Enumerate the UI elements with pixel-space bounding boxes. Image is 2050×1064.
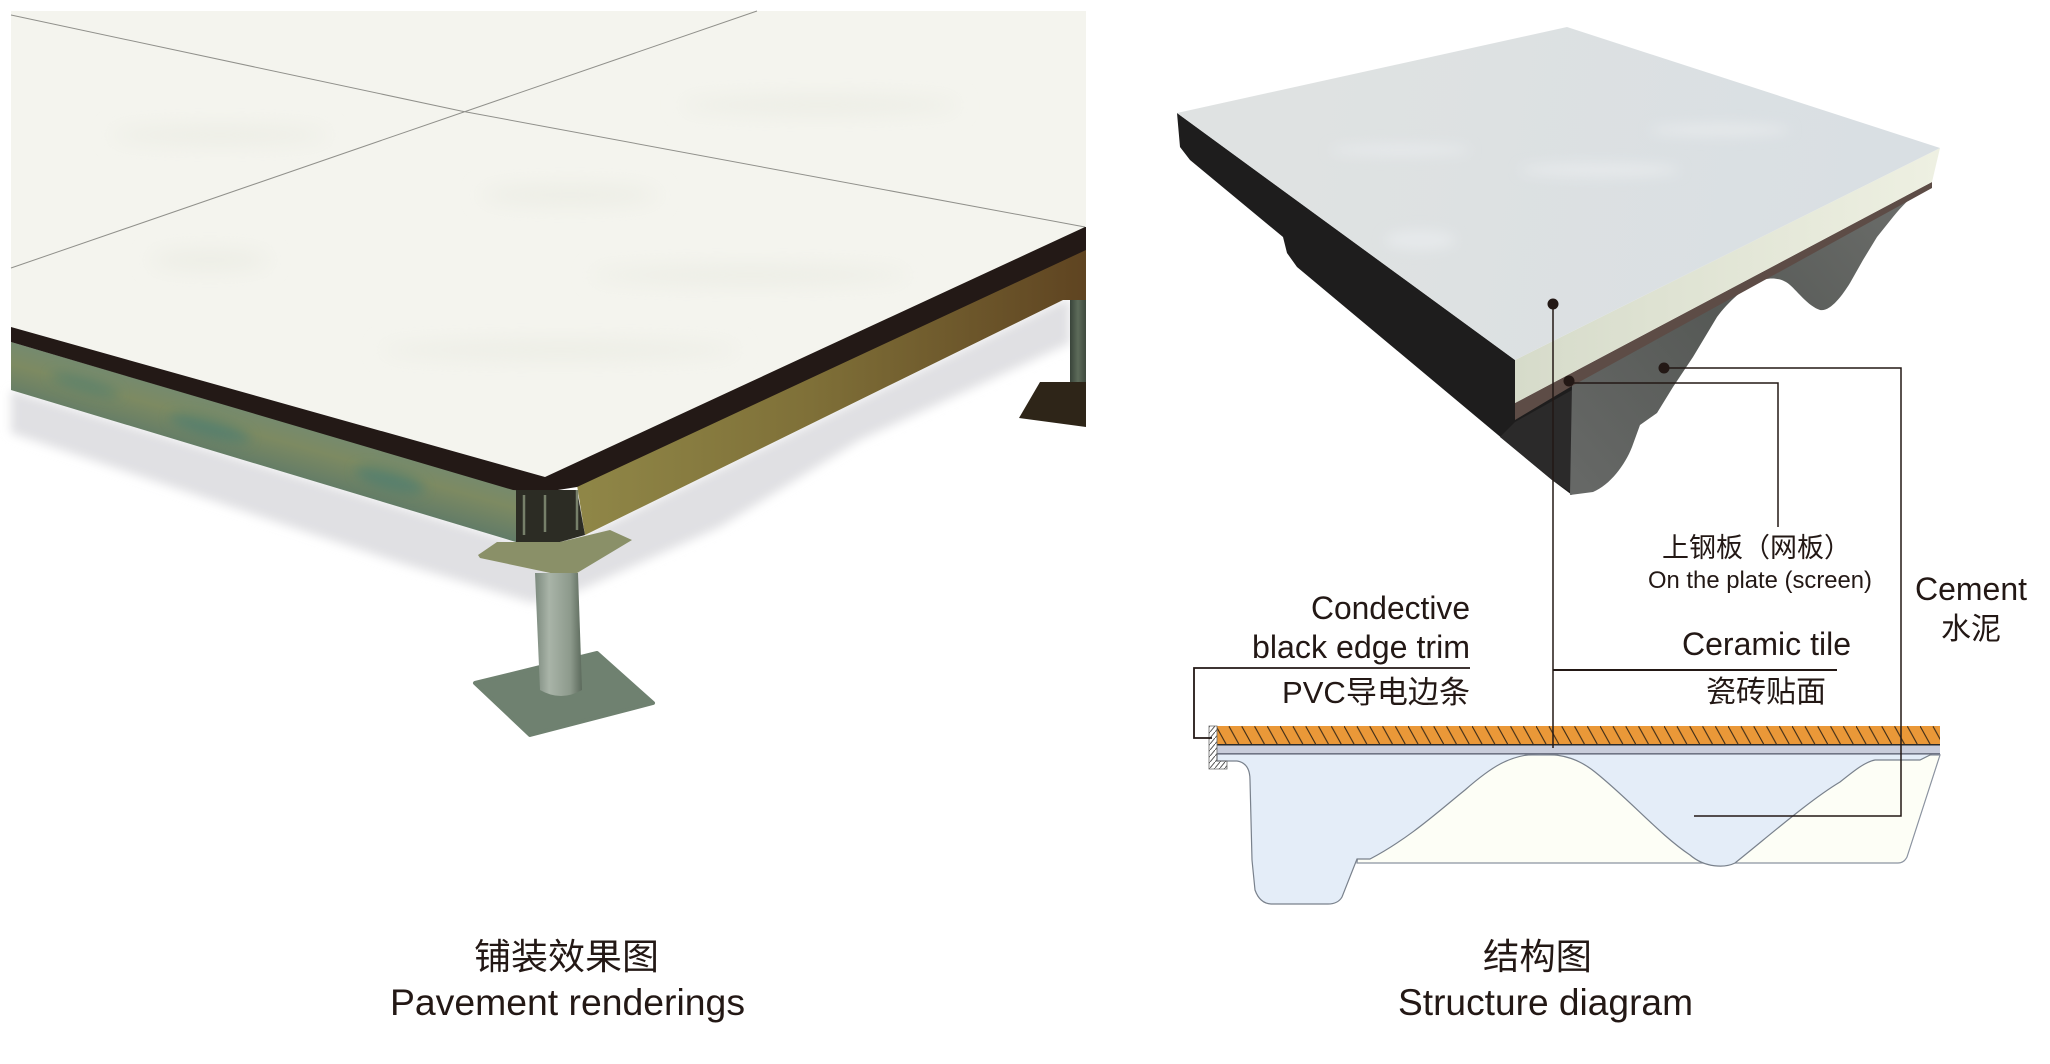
black edge trim (11, 227, 1086, 492)
label: Condective: Condective (1311, 590, 1470, 626)
caption: structure English: Structure diagram (1398, 982, 1693, 1023)
near pedestal base (475, 653, 653, 735)
panel: cross-section structure diagram (1209, 726, 1940, 904)
far pedestal post (1070, 300, 1086, 390)
right beam (577, 247, 1086, 535)
ceramic hatch (1217, 726, 1940, 744)
caption: pavement English: Pavement renderings (390, 982, 745, 1023)
far pedestal base (1019, 382, 1086, 427)
leader dot: cement (1658, 362, 1670, 374)
tile thickness (1515, 148, 1940, 403)
panel: pavement rendering photo (11, 11, 1086, 735)
leader dot: tile (1548, 298, 1558, 310)
caption: structure Chinese: 结构图 (1483, 936, 1592, 977)
grey cement underside (1570, 184, 1932, 495)
panel: tile product photo (1177, 27, 1940, 495)
white cavity outline (1357, 755, 1940, 863)
label: black edge trim: black edge trim (1252, 629, 1470, 665)
near pedestal head plate (478, 530, 632, 575)
leader: ceramic tile (1548, 298, 1837, 748)
left beam patina (49, 369, 427, 500)
floor shadow (11, 300, 1070, 603)
plate rule (1217, 753, 1940, 754)
label: steel plate Chinese: 上钢板（网板） (1662, 533, 1851, 563)
tile top surface (1177, 27, 1940, 360)
label: ceramic tile Chinese: 瓷砖贴面 (1706, 676, 1826, 709)
leader: edge trim (1194, 668, 1470, 738)
label: Ceramic tile: Ceramic tile (1682, 626, 1851, 662)
left beam (11, 342, 516, 542)
label: Cement: Cement (1915, 571, 2027, 607)
near pedestal post (535, 573, 582, 696)
caption: pavement Chinese: 铺装效果图 (474, 936, 659, 977)
raised floor tile surface (11, 11, 1086, 477)
leader: steel plate (1564, 376, 1778, 527)
corner joint (516, 490, 585, 542)
label: steel plate English: On the plate (screen) (1648, 567, 1872, 594)
steel plate edge (1515, 182, 1932, 420)
tile mottling (110, 96, 960, 359)
cement body (1217, 754, 1932, 904)
ceramic tile layer (1217, 726, 1940, 744)
tile veining (1330, 124, 1790, 250)
label: cement Chinese: 水泥 (1941, 613, 2001, 646)
lower dark side tone (1500, 390, 1572, 493)
tile joints (11, 11, 1085, 268)
steel plate band (1217, 745, 1940, 753)
corner joint highlights (524, 490, 577, 535)
PVC edge trim (1209, 726, 1227, 769)
leader: cement (1658, 362, 1901, 816)
layer rule (1217, 744, 1940, 746)
leader dot: steel plate (1564, 376, 1574, 386)
black conductive side (1177, 113, 1572, 495)
label: PVC trim Chinese: PVC导电边条 (1282, 675, 1470, 710)
